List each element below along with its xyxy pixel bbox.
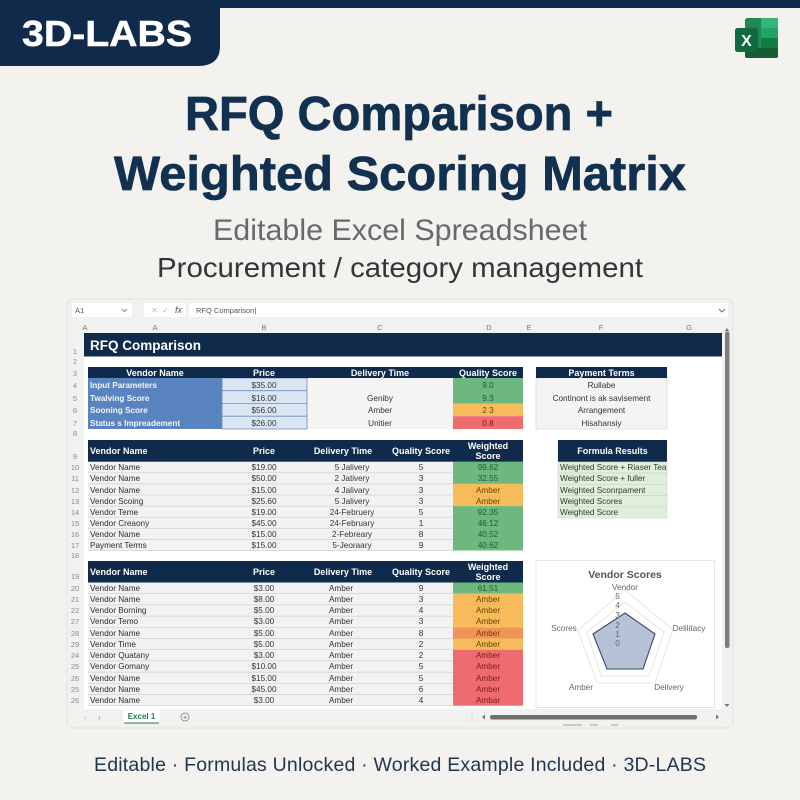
row numbers: 7 (73, 419, 77, 428)
row numbers: 21 (71, 595, 79, 604)
row numbers: 11 (71, 474, 79, 483)
table: vendor status: Quality Score (392, 567, 450, 577)
table: vendor comparison: $19.00 (251, 463, 277, 472)
sheet tab bar: ‹ (84, 713, 87, 722)
formula bar (72, 303, 728, 317)
table: vendor status: 3 (419, 617, 424, 626)
table: vendor comparison: 92.35 (478, 508, 499, 517)
row numbers: 14 (71, 508, 79, 517)
table: vendor status: 2 (419, 651, 424, 660)
table: input parameters: $16.00 (251, 394, 277, 403)
table: vendor status: $3.00 (254, 696, 275, 705)
table: vendor status: $5.00 (254, 640, 275, 649)
table: vendor comparison: Amber (476, 497, 500, 506)
table: vendor comparison: 2 Jativery (334, 474, 370, 483)
formula bar: RFQ Comparison| (196, 306, 256, 315)
radar chart: Vendor Scores: 0 (615, 639, 620, 648)
table: vendor status: Amber (329, 595, 353, 604)
table: vendor comparison: 3 (419, 474, 424, 483)
table: vendor status: Vendor Name (90, 595, 141, 604)
table: vendor status: Amber (329, 584, 353, 593)
row numbers: 1 (73, 347, 77, 356)
table: formula results (558, 440, 667, 518)
table: vendor status: Amber (476, 595, 500, 604)
table: vendor status: Weighted (468, 562, 508, 572)
table: vendor status: Amber (329, 640, 353, 649)
row numbers: 6 (73, 406, 77, 415)
table: payment terms: Hisahansiy (581, 419, 622, 428)
column headers: E (526, 323, 532, 332)
title: RFQ Comparison + (185, 88, 613, 141)
column headers: A (82, 323, 88, 332)
table: vendor status: Amber (476, 606, 500, 615)
table: vendor status: Amber (329, 606, 353, 615)
row numbers: 13 (71, 497, 79, 506)
sheet tab bar: Excel 1 (128, 712, 156, 721)
table: vendor status: $5.00 (254, 629, 275, 638)
radar chart: Vendor Scores: 5 (615, 592, 620, 601)
table: payment terms: Arrangement (578, 406, 626, 415)
radar chart: Vendor Scores (536, 560, 714, 708)
row numbers: 2 (73, 357, 77, 366)
table: vendor status: Vendor Time (90, 640, 136, 649)
table: vendor status: Vendor Borning (90, 606, 147, 615)
table: input parameters: Price (253, 368, 275, 378)
sheet tab bar (68, 709, 732, 727)
table: vendor comparison: $25.60 (251, 497, 277, 506)
table: vendor status: Vendor Name (90, 685, 141, 694)
table: input parameters: Amber (368, 406, 392, 415)
radar chart: Vendor Scores: Delivery (654, 683, 685, 692)
table: input parameters: $26.00 (251, 419, 277, 428)
table: vendor status: 5 (419, 674, 424, 683)
table: vendor comparison: $45.00 (251, 519, 277, 528)
table: vendor status: Price (253, 567, 275, 577)
table: formula results: Weighted Score (560, 508, 619, 517)
row numbers: 8 (73, 429, 77, 438)
vertical scrollbar (724, 328, 730, 707)
formula bar: A1 (75, 306, 84, 315)
row numbers: 9 (73, 452, 77, 461)
table: vendor status: 4 (419, 696, 424, 705)
table: vendor status: Vendor Name (90, 629, 141, 638)
sheet title bar (84, 333, 722, 356)
table: input parameters: Delivery Time (351, 368, 409, 378)
table: vendor comparison: 3 (419, 497, 424, 506)
row numbers: 10 (71, 463, 79, 472)
row numbers: 27 (71, 617, 79, 626)
brand badge: 3D-LABS (0, 0, 220, 66)
table: vendor status: Delivery Time (314, 567, 372, 577)
table: vendor comparison: Vendor Name (90, 446, 148, 456)
row numbers: 17 (71, 541, 79, 550)
table: formula results: Weighted Sconrpament (560, 486, 646, 495)
table: vendor status: $10.00 (251, 662, 277, 671)
table: vendor status: Score (475, 572, 501, 582)
table: vendor comparison: 46.12 (478, 519, 499, 528)
table: vendor status: Amber (476, 674, 500, 683)
table: vendor comparison: Payment Terms (90, 541, 147, 550)
table: vendor comparison: Amber (476, 486, 500, 495)
table: vendor status (88, 561, 523, 706)
table: formula results: Formula Results (577, 446, 648, 456)
title: Weighted Scoring Matrix (114, 148, 686, 201)
table: vendor comparison: $15.00 (251, 541, 277, 550)
table: vendor status: Amber (476, 651, 500, 660)
radar chart: Vendor Scores: Vendor Scores (588, 569, 662, 581)
table: payment terms (536, 367, 667, 429)
table: vendor status: Amber (329, 696, 353, 705)
table: input parameters: Geniby (367, 394, 394, 403)
table: vendor comparison: Price (253, 446, 275, 456)
table: vendor status: $45.00 (251, 685, 277, 694)
title (114, 88, 686, 201)
sheet tab bar: › (98, 713, 101, 722)
table: vendor status: Amber (476, 617, 500, 626)
table: vendor comparison: 32.55 (478, 474, 499, 483)
table: vendor comparison: Vendor Teme (90, 508, 139, 517)
table: vendor status: $15.00 (251, 674, 277, 683)
table: vendor comparison: 4 Jalivary (335, 486, 370, 495)
table: vendor comparison: 5 Jalivery (335, 497, 370, 506)
row numbers: 28 (71, 629, 79, 638)
table: vendor status: 8 (419, 629, 424, 638)
table: input parameters: 9.3 (482, 394, 494, 403)
row numbers: 20 (71, 584, 79, 593)
radar chart: Vendor Scores: Delilitacy (673, 624, 706, 633)
footer line: Editable · Formulas Unlocked · Worked Example Included · 3D-LABS (94, 754, 706, 776)
table: vendor status: Vendor Name (90, 567, 148, 577)
sheet tab bar: + (183, 714, 187, 722)
table: vendor comparison: 5 (419, 463, 424, 472)
table: vendor comparison: $50.00 (251, 474, 277, 483)
table: input parameters: $56.00 (251, 406, 277, 415)
table: input parameters: Quality Score (459, 368, 517, 378)
table: vendor status: Amber (476, 685, 500, 694)
table: input parameters: Unitier (368, 419, 392, 428)
table: vendor status: 6 (419, 685, 424, 694)
table: vendor comparison: 5 (419, 508, 424, 517)
table: vendor comparison: 99.62 (478, 463, 499, 472)
radar chart: Vendor Scores: 3 (615, 611, 620, 620)
table: input parameters: 0.8 (482, 419, 494, 428)
row numbers: 3 (73, 369, 77, 378)
table: vendor status: Vendor Quatany (90, 651, 150, 660)
sheet title bar: RFQ Comparison (90, 338, 201, 353)
row numbers: 19 (71, 572, 79, 581)
table: formula results: Weighted Score + fuller (560, 474, 645, 483)
table: vendor status: Vendor Name (90, 696, 141, 705)
table: input parameters: Twalving Score (90, 394, 150, 403)
table: input parameters: Input Parameters (90, 381, 157, 390)
table: vendor status: $3.00 (254, 584, 275, 593)
table: payment terms: Rullabe (588, 381, 616, 390)
table: input parameters: Status s Impreadement (90, 419, 180, 428)
table: vendor comparison: 24-February (330, 519, 375, 528)
table: vendor comparison: Vendor Name (90, 530, 141, 539)
table: vendor status: Amber (329, 685, 353, 694)
audience line: Procurement / category management (157, 252, 643, 283)
sheet tab bar: ⋮ (468, 713, 476, 722)
table: payment terms: Continont is ak savisement (553, 394, 651, 403)
row numbers: 24 (71, 651, 79, 660)
row numbers: 15 (71, 519, 79, 528)
row numbers: 12 (71, 486, 79, 495)
table: vendor comparison: 40.52 (478, 530, 499, 539)
subtitle: Editable Excel Spreadsheet (213, 214, 588, 247)
table: vendor status: Vendor Temo (90, 617, 139, 626)
table: vendor status: $5.00 (254, 606, 275, 615)
table: vendor comparison: 40.62 (478, 541, 499, 550)
brand badge: 3D-LABS: 3D-LABS (22, 13, 192, 54)
table: vendor status: 3 (419, 595, 424, 604)
table: formula results: Weighted Scores (560, 497, 622, 506)
row numbers: 25 (71, 685, 79, 694)
table: vendor status: Vendor Gomany (90, 662, 150, 671)
radar chart: Vendor Scores: 4 (615, 601, 620, 610)
table: vendor comparison: Weighted (468, 441, 508, 451)
table: payment terms: Payment Terms (568, 368, 635, 378)
table: vendor status: Amber (329, 674, 353, 683)
panel: spreadsheet window (67, 299, 733, 728)
radar chart: Vendor Scores: 1 (615, 630, 620, 639)
row numbers: 18 (71, 551, 79, 560)
table: vendor status: $3.00 (254, 617, 275, 626)
table: input parameters: Vendor Name (126, 368, 184, 378)
formula bar: ✓ (162, 306, 169, 315)
column headers: G (686, 323, 692, 332)
table: vendor status: $8.00 (254, 595, 275, 604)
table: vendor status: 4 (419, 606, 424, 615)
table: vendor status: 9 (419, 584, 424, 593)
column headers: C (377, 323, 383, 332)
table: vendor status: Vendor Name (90, 584, 141, 593)
radar chart: Vendor Scores: 2 (615, 621, 620, 630)
radar chart: Vendor Scores: Amber (569, 683, 593, 692)
table: vendor comparison: 24-Februery (330, 508, 375, 517)
table: vendor status: Amber (329, 617, 353, 626)
table: vendor comparison: 2-Febreary (332, 530, 373, 539)
row numbers: 16 (71, 530, 79, 539)
table: input parameters: 9.0 (482, 381, 494, 390)
table: vendor comparison: Vendor Name (90, 474, 141, 483)
column headers: A (152, 323, 158, 332)
column headers: F (599, 323, 604, 332)
table: vendor comparison: Quality Score (392, 446, 450, 456)
row numbers: 4 (73, 381, 77, 390)
table: vendor comparison: Vendor Name (90, 486, 141, 495)
icon: Excel logo: X (741, 33, 752, 50)
row numbers: 25 (71, 662, 79, 671)
table: vendor comparison: 8 (419, 530, 424, 539)
table: vendor status: 61.51 (478, 584, 499, 593)
table: input parameters: $35.00 (251, 381, 277, 390)
column headers (68, 320, 723, 333)
row numbers: 29 (71, 640, 79, 649)
table: vendor comparison: 5 Jalivery (335, 463, 370, 472)
table: vendor status: 2 (419, 640, 424, 649)
table: input parameters (88, 367, 523, 429)
radar chart: Vendor Scores: Scores (551, 624, 577, 633)
formula bar: fx (175, 305, 183, 315)
table: vendor comparison: $15.00 (251, 530, 277, 539)
table: vendor status: Amber (329, 662, 353, 671)
table: vendor status: $3.00 (254, 651, 275, 660)
row numbers: 22 (71, 606, 79, 615)
row numbers: 26 (71, 674, 79, 683)
table: vendor status: Vendor Name (90, 674, 141, 683)
table: vendor status: Amber (476, 629, 500, 638)
table: vendor comparison: Delivery Time (314, 446, 372, 456)
table: vendor status: Ambar (476, 696, 500, 705)
table: vendor comparison: 5-Jeoraary (332, 541, 372, 550)
table: formula results: Weighted Score + Riaser Tea (560, 463, 667, 472)
table: vendor status: Amber (329, 629, 353, 638)
table: vendor comparison: 3 (419, 486, 424, 495)
sheet area (84, 333, 722, 709)
table: vendor comparison: 1 (419, 519, 424, 528)
table: input parameters: Sooning Score (90, 406, 148, 415)
row numbers: 5 (73, 394, 77, 403)
table: vendor comparison: Vendor Scoing (90, 497, 144, 506)
row numbers: 26 (71, 696, 79, 705)
table: vendor comparison: $15.00 (251, 486, 277, 495)
icon: Excel logo (735, 18, 778, 58)
table: vendor status: 5 (419, 662, 424, 671)
table: vendor comparison: Score (475, 451, 501, 461)
table: vendor comparison (88, 440, 523, 550)
table: vendor status: Amber (476, 662, 500, 671)
table: vendor comparison: 9 (419, 541, 424, 550)
table: input parameters: 2 3 (482, 406, 494, 415)
table: vendor comparison: Vendor Name (90, 463, 141, 472)
formula bar: ✕ (151, 306, 158, 315)
column headers: D (486, 323, 492, 332)
table: vendor status: Amber (476, 640, 500, 649)
table: vendor status: Amber (329, 651, 353, 660)
row numbers (71, 347, 79, 705)
radar chart: Vendor Scores: Vendor (612, 583, 638, 592)
column headers: B (261, 323, 267, 332)
table: vendor comparison: $19.00 (251, 508, 277, 517)
table: vendor comparison: Vendor Creaony (90, 519, 150, 528)
